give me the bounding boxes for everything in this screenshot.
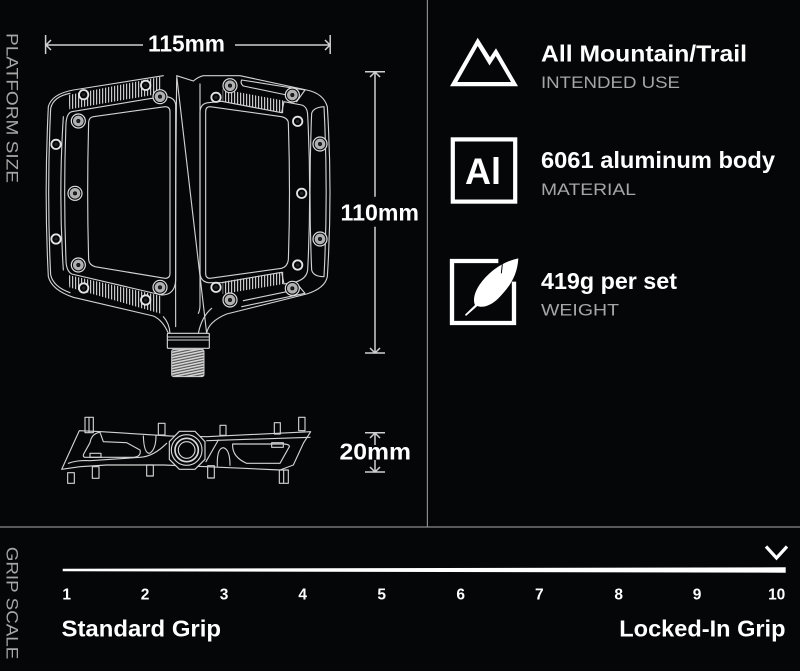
spec: intended use: All Mountain/Trail xyxy=(541,41,747,67)
grip scale numbers: 4 xyxy=(298,586,307,603)
height dimension: 110mm xyxy=(340,72,419,353)
thickness dimension: 20mm xyxy=(340,433,411,472)
spec: material xyxy=(541,147,775,199)
spec: intended use: INTENDED USE xyxy=(541,73,680,92)
grip scale numbers: 2 xyxy=(141,586,149,603)
spindle and thread xyxy=(167,333,209,377)
height dimension: 110mm: 110mm xyxy=(340,200,419,226)
thickness dimension: 20mm: 20mm xyxy=(340,438,411,464)
grip scale indicator chevron xyxy=(766,546,787,558)
icon: feather xyxy=(452,258,518,323)
bearing hub xyxy=(169,431,205,469)
grip scale bar xyxy=(63,567,786,573)
grip scale numbers: 8 xyxy=(614,586,623,603)
spec: material: 6061 aluminum body xyxy=(541,147,775,173)
spec: weight: WEIGHT xyxy=(541,301,619,320)
width dimension: 115mm xyxy=(46,30,330,56)
pedal top view xyxy=(46,76,330,377)
spec: weight xyxy=(541,268,677,320)
grip scale numbers: 7 xyxy=(535,586,544,603)
icon: mountain xyxy=(450,38,518,86)
scale label: locked-in grip: Locked-In Grip xyxy=(619,616,786,642)
pedal side view xyxy=(62,417,311,483)
grip scale numbers: 5 xyxy=(377,586,386,603)
grip scale numbers: 9 xyxy=(693,586,702,603)
spec: weight: 419g per set xyxy=(541,268,677,294)
width dimension: 115mm: 115mm xyxy=(148,30,225,56)
traction pins xyxy=(51,79,327,307)
icon: aluminum element: Al xyxy=(465,151,501,192)
vertical label: grip scale: GRIP SCALE xyxy=(2,547,22,659)
grip scale numbers: 10 xyxy=(768,586,785,603)
spec: intended use xyxy=(541,41,747,92)
panel dividers xyxy=(0,0,800,527)
grip scale numbers: 1 xyxy=(62,586,71,603)
pedal body outline xyxy=(46,76,330,333)
grip scale numbers: 3 xyxy=(220,586,229,603)
vertical label: platform size: PLATFORM SIZE xyxy=(2,33,22,183)
spec: material: MATERIAL xyxy=(541,180,636,199)
knurled traction bands xyxy=(68,77,284,314)
scale label: standard grip: Standard Grip xyxy=(62,616,221,642)
grip scale numbers xyxy=(62,586,785,603)
icon: aluminum element xyxy=(453,139,515,202)
grip scale numbers: 6 xyxy=(456,586,465,603)
